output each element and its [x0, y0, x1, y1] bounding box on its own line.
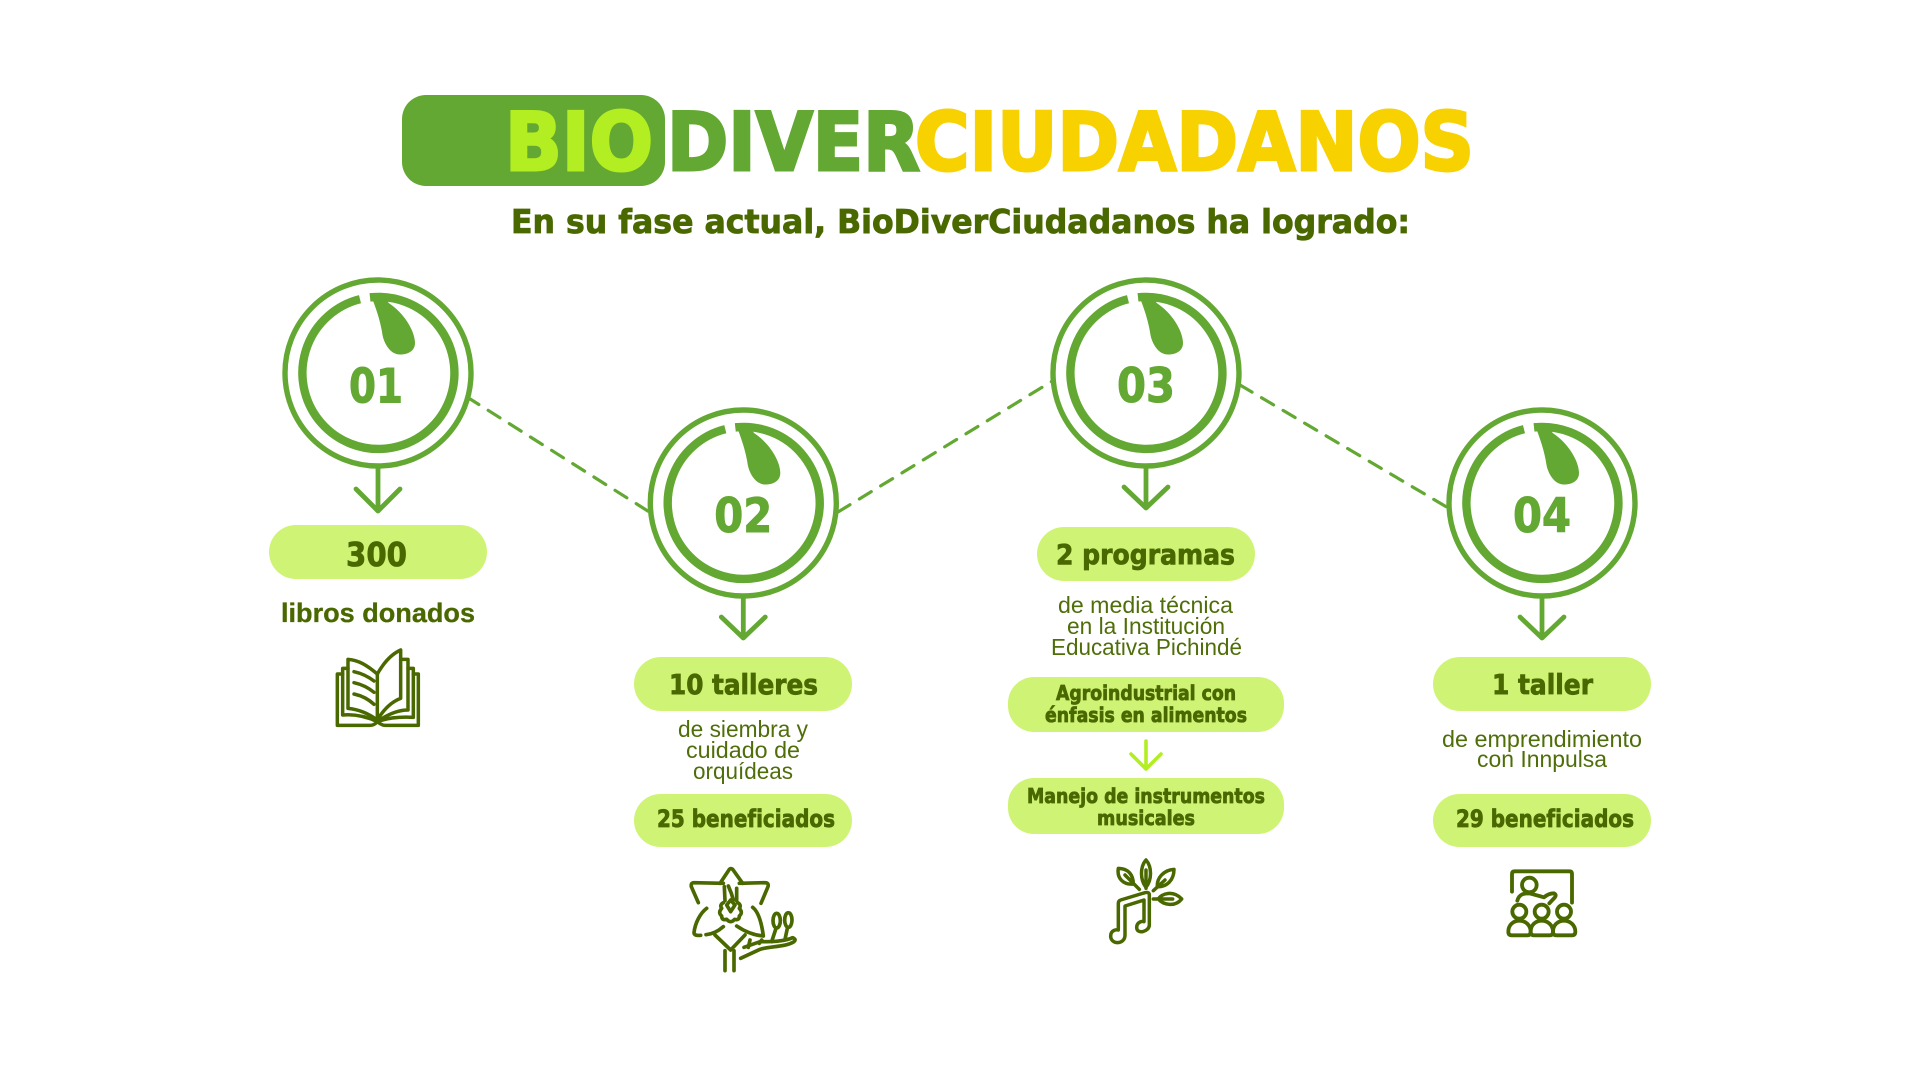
- text: de siembra y cuidado de orquideas: cuidado de: [686, 737, 800, 763]
- pill: 25 beneficiados: [634, 794, 852, 847]
- pill: 10 talleres: 10 talleres: [669, 668, 818, 701]
- pill: 300: 300: [346, 535, 407, 574]
- text: de media tecnica: de media técnica: [1058, 592, 1233, 618]
- step 04 content: [1433, 657, 1651, 935]
- step 03 badge: [1053, 280, 1239, 508]
- pill: 1 taller: 1 taller: [1492, 668, 1593, 701]
- text: de emprendimiento con Innpulsa: [1442, 726, 1642, 772]
- pill: 25 beneficiados: 25 beneficiados: [657, 805, 835, 833]
- step 02 badge: [650, 410, 836, 638]
- pill: 29 beneficiados: [1433, 794, 1651, 847]
- title: BioDiverCiudadanos: BIO: [505, 96, 653, 189]
- step 02 content: [634, 657, 852, 971]
- icon: music note with leaves: [1111, 860, 1182, 943]
- text: de media tecnica: [1051, 592, 1242, 660]
- pill: 1 taller: [1433, 657, 1651, 711]
- pill: 300: [269, 525, 487, 579]
- step 02 badge: 02: [714, 489, 772, 544]
- step 04 badge: [1449, 410, 1635, 638]
- title: BioDiverCiudadanos: DIVER: [667, 96, 920, 189]
- text: de siembra y cuidado de orquideas: de siembra y: [678, 716, 808, 742]
- pill: agroindustrial: Agroindustrial con: [1056, 681, 1236, 705]
- text: de emprendimiento con Innpulsa: de emprendimiento: [1442, 726, 1642, 752]
- icon: teacher with students: [1508, 871, 1575, 935]
- text: de siembra y cuidado de orquideas: orquídeas: [693, 758, 793, 784]
- step 01 badge: [285, 280, 471, 511]
- dashed connector 1 to 2: [467, 397, 651, 513]
- text: de emprendimiento con Innpulsa: con Innpulsa: [1477, 746, 1607, 772]
- step 01 badge: 01: [349, 360, 403, 414]
- step 04 badge: 04: [1513, 489, 1571, 544]
- dashed connector 3 to 4: [1240, 385, 1450, 509]
- icon: orchid: [691, 869, 795, 971]
- dashed connector 2 to 3: [838, 380, 1054, 512]
- step 01 content: [269, 525, 487, 725]
- text: libros donados: libros donados: [281, 598, 475, 628]
- pill: 29 beneficiados: 29 beneficiados: [1456, 805, 1634, 833]
- pill: agroindustrial: énfasis en alimentos: [1045, 703, 1247, 727]
- title: BioDiverCiudadanos: CIUDADANOS: [915, 96, 1474, 189]
- arrow: small lime down: [1131, 741, 1161, 769]
- pill: 2 programas: [1037, 527, 1255, 581]
- icon: open book: [337, 650, 418, 725]
- step 03 content: [1008, 527, 1284, 943]
- pill: manejo de instrumentos: [1008, 778, 1284, 834]
- text: de media tecnica: Educativa Pichindé: [1051, 634, 1242, 660]
- title: BioDiverCiudadanos: [402, 95, 1474, 189]
- pill: manejo de instrumentos: Manejo de instrumentos: [1027, 784, 1265, 808]
- pill: manejo de instrumentos: musicales: [1097, 806, 1195, 830]
- subtitle: En su fase actual, BioDiverCiudadanos ha logrado:: [511, 202, 1410, 241]
- text: de media tecnica: en la Institución: [1067, 613, 1225, 639]
- pill: 2 programas: 2 programas: [1056, 538, 1235, 571]
- step 03 badge: 03: [1117, 359, 1175, 414]
- pill: agroindustrial: [1008, 677, 1284, 732]
- text: de siembra y cuidado de orquideas: [678, 716, 808, 784]
- pill: 10 talleres: [634, 657, 852, 711]
